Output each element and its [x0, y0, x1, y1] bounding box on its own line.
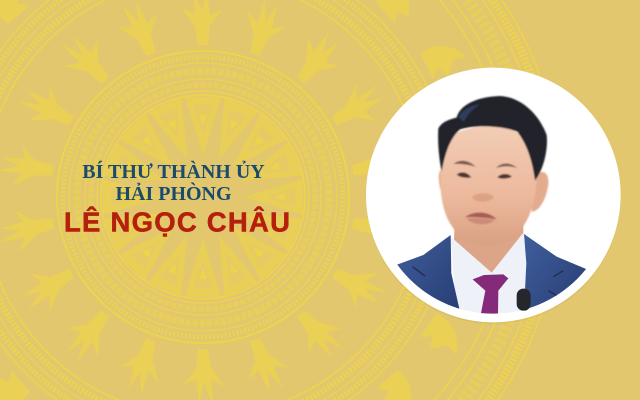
- microphone: [517, 289, 531, 311]
- white circle: [366, 68, 621, 322]
- brows: [453, 161, 517, 168]
- tie: [473, 274, 508, 317]
- hair: [438, 96, 547, 181]
- ears: [532, 172, 548, 212]
- nose: [472, 193, 494, 202]
- eyes: [457, 172, 512, 179]
- shirt: [451, 234, 526, 314]
- circle shadow: [366, 69, 621, 324]
- heading: name: LÊ NGỌC CHÂU: [64, 206, 290, 238]
- head: [438, 96, 548, 246]
- suit left: [397, 235, 460, 309]
- heading: title: HẢI PHÒNG: [115, 181, 232, 205]
- face: [440, 126, 537, 246]
- neck: [454, 224, 524, 272]
- left ear: [439, 170, 443, 193]
- lapel lines: [413, 267, 563, 296]
- suit right: [524, 234, 586, 308]
- portrait: [366, 68, 621, 324]
- hair highlight: [458, 104, 480, 122]
- mouth: [465, 213, 497, 219]
- heading: title: [82, 160, 265, 205]
- heading: title: BÍ THƯ THÀNH ỦY: [82, 160, 265, 183]
